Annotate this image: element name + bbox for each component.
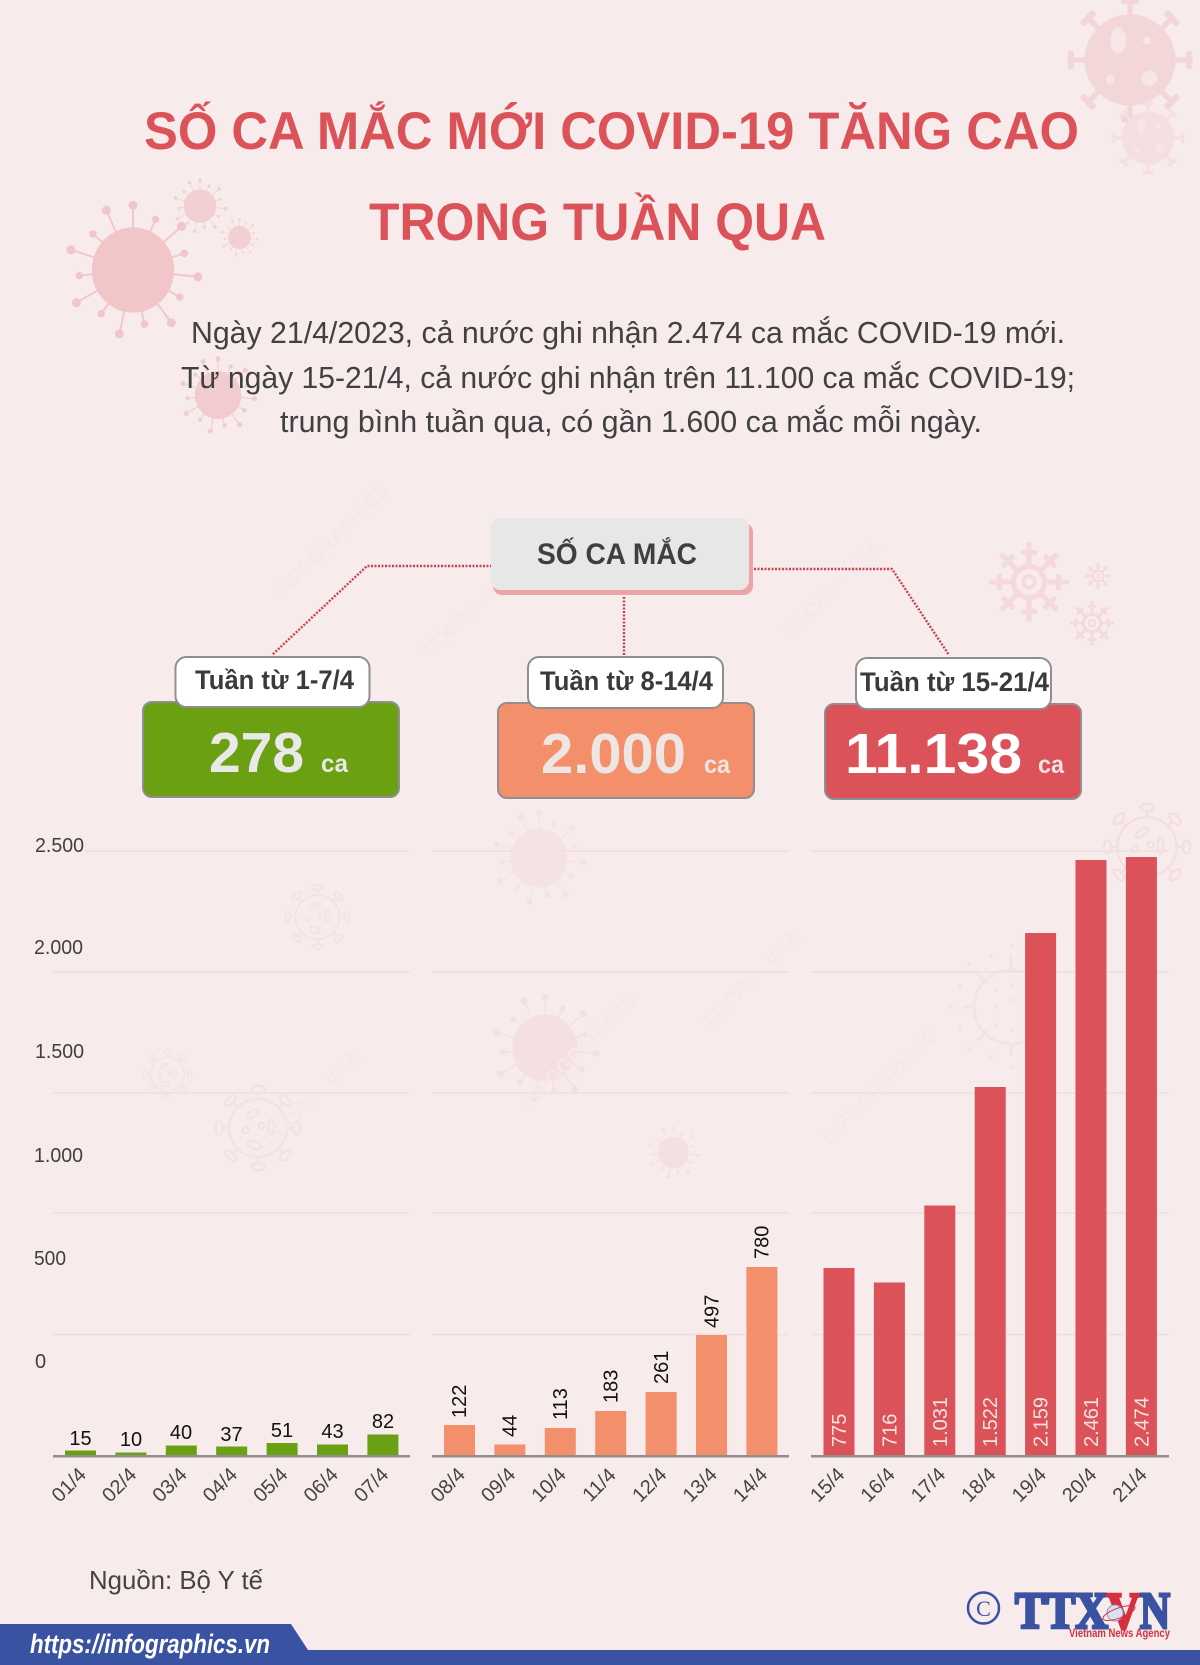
watermarks: INFOGRAPHICS	[818, 1025, 942, 1149]
watermarks: TTXVN – VNA	[258, 1046, 365, 1154]
panel: week 1-7/4 total	[143, 657, 399, 797]
x axis date labels: 13/4	[679, 1464, 722, 1507]
dotted connectors	[272, 566, 949, 657]
y axis labels: 500	[34, 1248, 66, 1270]
chart	[34, 835, 1169, 1507]
y axis labels: 2.000	[34, 937, 83, 959]
value labels: week 8-14/4: 44	[500, 1415, 522, 1437]
watermarks: INFOGRAPHICS	[270, 480, 394, 604]
title	[144, 100, 1079, 252]
value labels: week 8-14/4: 261	[651, 1351, 673, 1384]
x axis date labels: 01/4	[48, 1464, 91, 1507]
y axis labels	[34, 835, 84, 1373]
baselines	[53, 1455, 1169, 1458]
x axis date labels: 05/4	[249, 1464, 292, 1507]
y axis labels: 0	[35, 1351, 46, 1373]
value labels: week 8-14/4: 780	[752, 1226, 774, 1259]
panel: week 8-14/4 total: ca	[704, 751, 731, 779]
panel: week 15-21/4 total: 11.138	[845, 722, 1022, 786]
logo: TTXVN	[968, 1583, 1170, 1640]
y axis labels: 1.000	[34, 1145, 83, 1167]
x axis date labels: 15/4	[806, 1464, 849, 1507]
x axis date labels: 11/4	[578, 1464, 620, 1506]
x axis date labels: 14/4	[729, 1464, 772, 1507]
watermarks: TTXVN – VNA	[698, 926, 805, 1034]
x axis date labels: 19/4	[1008, 1464, 1051, 1507]
heading box: Số ca mắc: SỐ CA MẮC	[537, 537, 697, 571]
value labels: week 8-14/4: 497	[702, 1295, 724, 1328]
watermarks: TTXVN – VNA	[778, 536, 885, 644]
value labels: week 15-21/4: 2.461	[1081, 1397, 1103, 1447]
panel: week 1-7/4 total: ca	[321, 750, 349, 778]
bars: week 8-14/4	[444, 1267, 777, 1456]
y axis labels: 1.500	[35, 1041, 84, 1063]
value labels: week 8-14/4: 183	[600, 1370, 622, 1403]
footer band	[0, 1624, 1200, 1665]
x axis date labels: 12/4	[628, 1464, 671, 1507]
logo: TTXVN: TTX	[1015, 1583, 1108, 1640]
panel: week 15-21/4 total: ca	[1038, 751, 1065, 779]
value labels: week 8-14/4: 113	[550, 1388, 572, 1420]
title: SỐ CA MẮC MỚI COVID-19 TĂNG CAO	[144, 100, 1079, 161]
value labels: week 1-7/4	[69, 1411, 394, 1451]
panel: week 15-21/4 total	[825, 658, 1081, 799]
panel: week 1-7/4 total: 278	[209, 721, 304, 785]
value labels: week 15-21/4: 775	[829, 1414, 851, 1447]
value labels: week 1-7/4: 40	[170, 1422, 192, 1444]
value labels: week 1-7/4: 37	[220, 1424, 243, 1446]
watermarks	[258, 480, 942, 1154]
x axis date labels: 21/4	[1109, 1464, 1152, 1507]
logo: TTXVN: V	[1107, 1583, 1140, 1640]
watermarks: TTXVN – VNA	[418, 556, 525, 664]
bars: week 1-7/4	[65, 1434, 398, 1456]
source note: Nguồn: Bộ Y tế	[89, 1565, 264, 1595]
logo: TTXVN: Vietnam News Agency	[1069, 1628, 1170, 1640]
panel: week 1-7/4 total: Tuần từ 1-7/4	[195, 665, 354, 695]
heading box: Số ca mắc	[491, 518, 753, 595]
x axis date labels: 02/4	[98, 1464, 141, 1507]
value labels: week 15-21/4: 2.159	[1030, 1397, 1052, 1447]
value labels: week 15-21/4: 1.522	[980, 1397, 1002, 1447]
panel: week 8-14/4 total: 2.000	[541, 722, 686, 786]
logo: TTXVN: C	[976, 1596, 991, 1621]
value labels: week 1-7/4: 43	[321, 1421, 344, 1443]
y axis labels: 2.500	[35, 835, 84, 857]
x axis date labels: 07/4	[350, 1464, 393, 1507]
x axis date labels: 20/4	[1058, 1464, 1101, 1507]
x axis date labels: 08/4	[427, 1464, 470, 1507]
value labels: week 15-21/4: 2.474	[1132, 1397, 1154, 1447]
intro text: Từ ngày 15-21/4, cả nước ghi nhận trên 11.100 ca mắc COVID-19;	[181, 360, 1075, 395]
value labels: week 15-21/4: 1.031	[930, 1397, 952, 1447]
value labels: week 8-14/4: 122	[449, 1385, 471, 1418]
logo: TTXVN: N	[1140, 1583, 1170, 1640]
x axis date labels	[48, 1464, 1152, 1507]
x axis date labels: 18/4	[957, 1464, 1001, 1507]
value labels: week 1-7/4: 15	[69, 1428, 92, 1450]
x axis date labels: 10/4	[528, 1464, 571, 1507]
x axis date labels: 09/4	[477, 1464, 520, 1507]
x axis date labels: 06/4	[300, 1464, 343, 1507]
bars: week 15-21/4	[824, 857, 1157, 1456]
value labels: week 8-14/4	[449, 1226, 774, 1437]
intro text: trung bình tuần qua, có gần 1.600 ca mắc mỗi ngày.	[280, 404, 982, 439]
title: TRONG TUẦN QUA	[369, 192, 826, 252]
value labels: week 1-7/4: 82	[372, 1411, 394, 1433]
value labels: week 15-21/4: 716	[880, 1414, 902, 1447]
panel: week 15-21/4 total: Tuần từ 15-21/4	[860, 667, 1049, 697]
x axis date labels: 03/4	[149, 1464, 192, 1507]
value labels: week 1-7/4: 10	[120, 1429, 142, 1451]
intro text	[181, 315, 1075, 439]
x axis date labels: 16/4	[857, 1464, 900, 1507]
decorative virus illustrations	[66, 0, 1192, 1178]
value labels: week 1-7/4: 51	[271, 1420, 293, 1442]
panel: week 8-14/4 total	[498, 657, 754, 798]
panel: week 8-14/4 total: Tuần từ 8-14/4	[540, 666, 713, 696]
intro text: Ngày 21/4/2023, cả nước ghi nhận 2.474 ca mắc COVID-19 mới.	[191, 315, 1065, 350]
watermarks: INFOGRAPHICS	[518, 990, 642, 1114]
x axis date labels: 04/4	[199, 1464, 242, 1507]
x axis date labels: 17/4	[907, 1464, 950, 1507]
footer band: https://infographics.vn	[30, 1629, 270, 1659]
value labels: week 15-21/4	[829, 1397, 1154, 1447]
